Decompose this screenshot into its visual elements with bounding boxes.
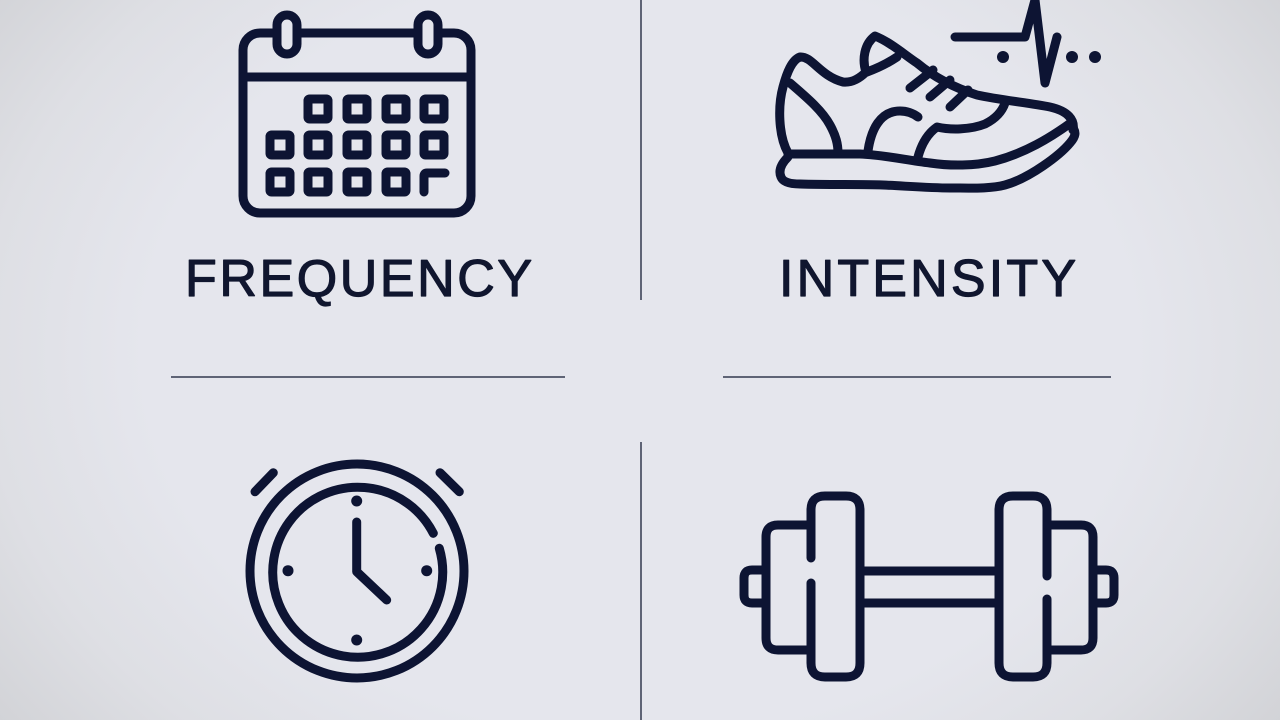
- heading: frequency: FREQUENCY: [185, 250, 532, 308]
- icon: calendar: [243, 15, 471, 213]
- icon: running shoe with pulse: [780, 0, 1101, 188]
- heading: intensity: INTENSITY: [779, 250, 1076, 308]
- icon: dumbbell: [744, 496, 1114, 677]
- icon: stopwatch clock: [250, 464, 464, 678]
